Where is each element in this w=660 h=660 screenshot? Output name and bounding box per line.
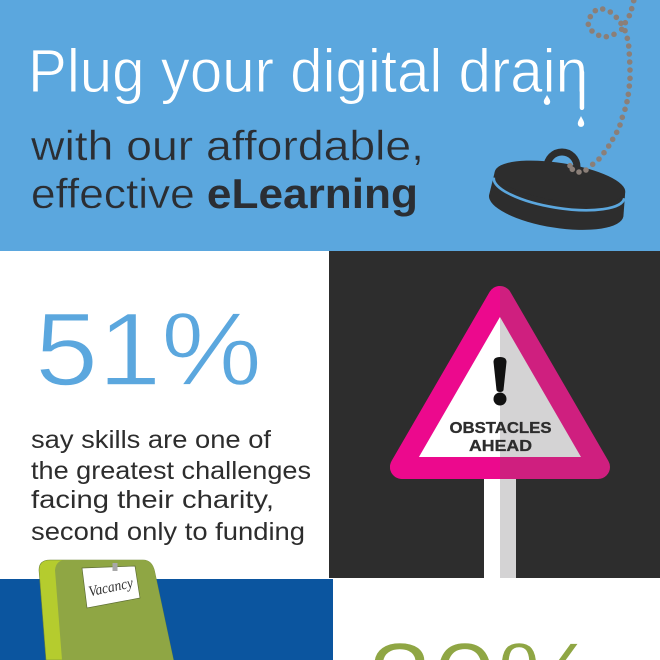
statistic description bbox=[31, 426, 311, 546]
panel: vacancy bbox=[0, 560, 333, 660]
sign post bbox=[484, 479, 516, 578]
sign text: OBSTACLES bbox=[450, 420, 552, 437]
statistic number: 51% bbox=[35, 292, 262, 408]
statistic description: facing their charity, bbox=[31, 486, 274, 514]
subtitle bbox=[30, 122, 424, 217]
statistic description: the greatest challenges bbox=[31, 457, 311, 485]
statistic description: second only to funding bbox=[31, 518, 305, 546]
panel: obstacles sign bbox=[329, 251, 660, 578]
sign text: AHEAD bbox=[469, 438, 532, 455]
icon: exclamation mark bbox=[494, 357, 506, 406]
icon: drain plug bbox=[486, 152, 630, 238]
title: Plug your digital drain bbox=[28, 37, 588, 105]
vacancy note: Vacancy bbox=[87, 575, 135, 600]
panel: header bbox=[0, 0, 660, 251]
panel: 51% statistic bbox=[31, 292, 311, 546]
subtitle: with our affordable, bbox=[30, 122, 424, 169]
icon: plug chain bbox=[567, 0, 636, 175]
sign text bbox=[450, 420, 552, 455]
statistic description: say skills are one of bbox=[31, 426, 271, 454]
warning triangle bbox=[402, 298, 598, 467]
subtitle: effective eLearning bbox=[31, 170, 418, 217]
icon: clipboard bbox=[39, 560, 174, 660]
